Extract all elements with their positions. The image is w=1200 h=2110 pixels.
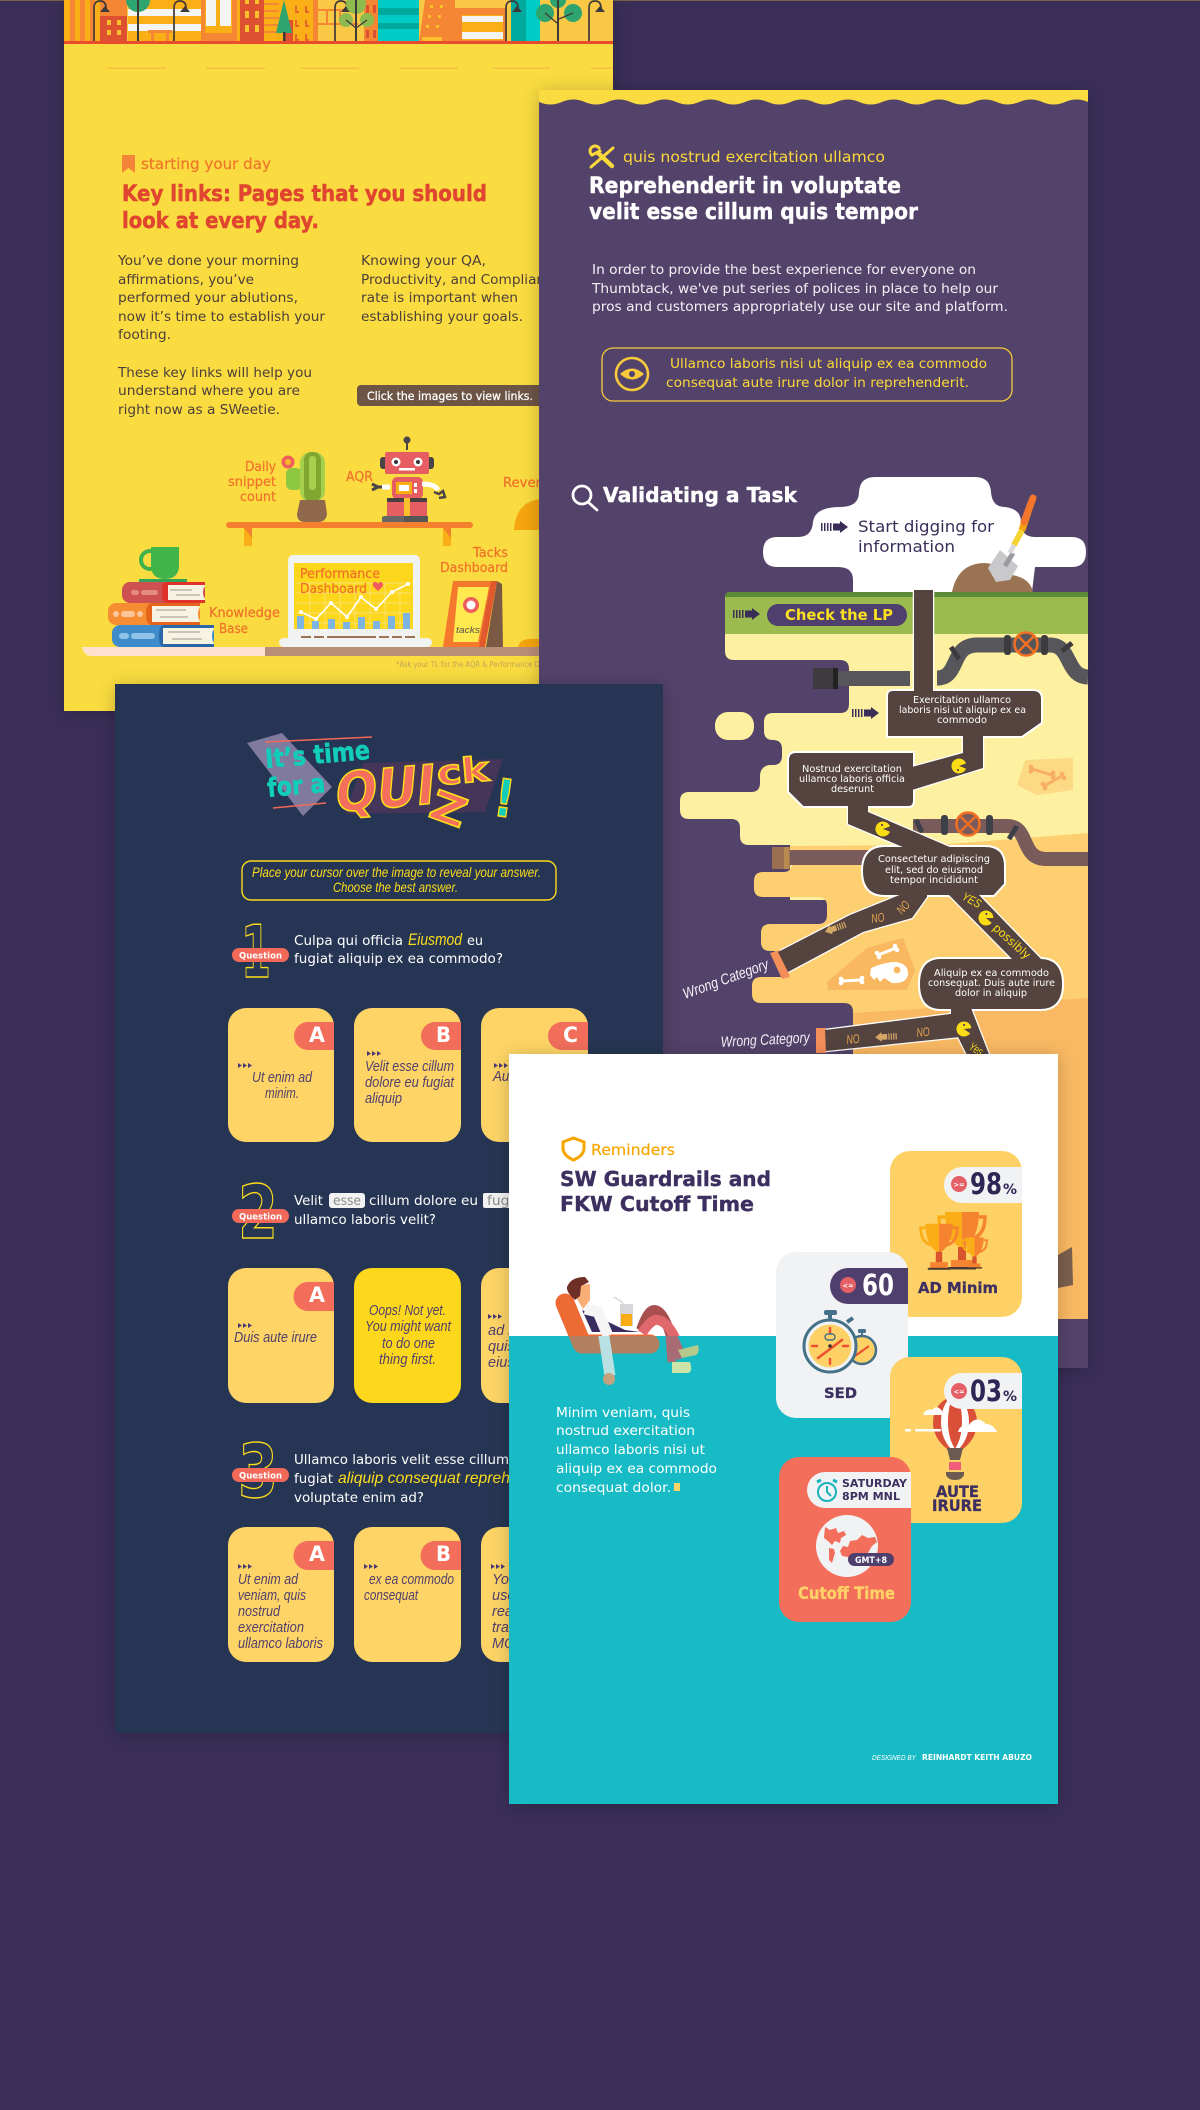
instruction box [242,861,556,900]
illustration: laptop performance dashboard: Performance [300,567,380,582]
soil layers [680,634,1088,1319]
illustration: orange stand [518,639,545,647]
road labels: no [846,898,930,1047]
q3 card B [354,1527,461,1662]
heading: Reprehenderit in voluptate [589,174,901,199]
icon: stopwatches [804,1310,876,1372]
callout: eye note: Ullamco laboris nisi ut aliquip ex ea commodo [670,357,987,372]
q3 card B: consequat [364,1588,419,1604]
q1 card B [354,1008,461,1142]
question 3 [232,1429,559,1515]
text block: left column: understand where you are [118,384,300,399]
q3 card C: read [492,1604,522,1620]
flowchart box 3 [862,846,1005,896]
stat card: aute irure: % [1003,1389,1017,1405]
heading: key links: look at every day. [122,209,319,234]
illustration: bell dome [514,499,545,530]
flowchart box 4: consequat. Duis aute irure [928,978,1055,989]
stat card: aute irure [890,1357,1022,1523]
flowchart box 2 [788,752,914,807]
road labels: no: NO [870,910,885,926]
question 3: voluptate enim ad? [294,1490,424,1506]
q1 card A: Ut enim ad [252,1070,313,1086]
text block: minim veniam: aliquip ex ea commodo [556,1462,717,1477]
label: daily snippet count [228,460,276,505]
flowchart box 3: elit, sed do eiusmod [885,865,983,876]
flowchart roads [770,590,1042,1057]
logo: it's time for a quick quiz: Z [424,782,473,838]
label: daily snippet count: count [240,490,276,505]
text block: left column [117,254,326,418]
q2 card B revealed [354,1268,461,1403]
credit: REINHARDT KEITH ABUZO [922,1753,1032,1762]
flowchart box 1: Exercitation ullamco [913,695,1011,706]
eyebrow: quis nostrud exercitation ullamco [623,148,885,166]
label: tacks dashboard: Dashboard [440,561,508,576]
text block: right column: rate is important when [361,291,518,306]
question 1: eu [467,933,483,949]
stat card: aute irure: AUTE [936,1482,979,1501]
text block: left column: affirmations, you’ve [118,273,254,288]
credit [872,1753,1032,1762]
question 3: 3 [238,1429,278,1515]
panel: reminders [509,1054,1058,1804]
text: start digging [858,517,994,556]
q3 card B: B [436,1542,451,1566]
text block: left column: You’ve done your morning [117,254,299,269]
stat card: aute irure: 03 [970,1374,1002,1408]
illustration: cactus [282,452,327,522]
icon: hot-air balloon [905,1397,997,1480]
icon: globe [816,1515,878,1577]
stat card: SED: SED [824,1386,857,1402]
flowchart box 4: dolor in aliquip [955,988,1027,999]
question 3: Ullamco laboris velit esse cillum [294,1452,509,1468]
question 3: fugiat [294,1471,333,1487]
label: daily snippet count: snippet [228,475,276,490]
q1 card B: aliquip [365,1091,402,1107]
q3 card C: use [492,1588,515,1604]
icon: arrow at box 1 [852,707,879,719]
text block: minim veniam: nostrud exercitation [556,1424,695,1439]
panel: starting your day [64,0,613,711]
icon: arrow to start digging [821,521,848,533]
heading: velit esse cillum quis tempor [589,200,918,225]
illustration: laptop performance dashboard [279,555,432,647]
q1 card A [228,1008,334,1142]
intro paragraph: Thumbtack, we've put series of polices in place to help our [591,282,999,297]
icon: magnifier [573,486,597,510]
question 2 [232,1170,527,1256]
q2 card B revealed: to do one [382,1336,435,1352]
q2 card A [228,1268,334,1403]
pacman markers [875,759,995,1038]
section heading: validating a task: Validating a Task [603,483,798,507]
illustration: robot [372,436,445,522]
logo: it's time for a quick quiz: QUI [333,752,438,825]
text block: left column: right now as a SWeetie. [118,403,280,418]
icon: alarm clock [817,1480,837,1501]
label: daily snippet count: Daily [245,460,276,475]
stat card: SED: 60 [862,1268,894,1302]
q2 card C: ad minim [488,1323,547,1339]
stat card: cutoff time: Cutoff Time [798,1584,895,1603]
text block: minim veniam: ullamco laboris nisi ut [556,1443,705,1458]
flowchart box 1: laboris nisi ut aliquip ex ea [899,705,1026,716]
road junction fill [778,590,1042,1057]
question 1: Eiusmod [408,930,462,949]
q1 card C [481,1008,588,1142]
stat card: AD minim: >= [954,1181,965,1189]
text block: right column: Knowing your QA, [361,254,486,269]
intro paragraph [591,263,1008,315]
callout: eye note: consequat aute irure dolor in reprehenderit. [666,376,969,391]
question 2: fugiat [487,1193,527,1209]
q3 card B: ex ea commodo [369,1572,454,1588]
road labels: no: NO [846,1032,860,1047]
q3 card A: veniam, quis [238,1588,306,1604]
q3 card A: ullamco laboris [238,1636,323,1652]
text block: left column: footing. [118,328,171,343]
fossil: bones rock [1017,758,1073,795]
label: revert: Reverts [503,476,553,491]
road labels: no: NO [894,898,913,917]
q2 card C [481,1268,588,1403]
road labels: yes possibly: YES [960,889,984,911]
question 3: aliquip consequat reprehenderit [338,1470,559,1487]
text: start digging: Start digging for [858,517,994,536]
q2 card A: Duis aute irure [234,1330,317,1346]
label: knowledge base [209,606,280,637]
logo: it's time for a quick quiz: for a [266,769,326,804]
question 2: esse [333,1193,361,1209]
intro paragraph: pros and customers appropriately use our site and platform. [592,300,1008,315]
q1 card A: A [309,1023,326,1047]
logo: it's time for a quick quiz: ! [490,768,518,831]
text block: minim veniam: Minim veniam, quis [556,1406,690,1421]
label: tacks dashboard [440,546,508,576]
stat card: AD minim [890,1151,1022,1317]
stat card: cutoff time: 8PM MNL [842,1490,900,1503]
flowchart box 1 [887,690,1042,737]
stat card: SED [776,1252,908,1418]
instruction box: Choose the best answer. [333,879,458,895]
pipe with valve: lower [772,812,1088,869]
question 2: Question [239,1212,282,1222]
q1 card B: B [436,1023,451,1047]
text: start digging: information [858,537,955,556]
instruction box: Place your cursor over the image to reveal your answer. [252,864,541,880]
illustration: tacks frame: tacks [456,625,481,635]
road labels: yes possibly [960,889,1034,1059]
q1 card C: Aut [492,1069,514,1085]
stat card: aute irure: <= [954,1388,965,1396]
flowchart box 2: ullamco laboris officia [799,774,905,785]
q3 card A: nostrud [238,1604,281,1620]
text block: right column [361,254,561,325]
illustration: shovel and dirt mound [952,498,1033,592]
stat card: AD minim: 98 [970,1167,1002,1201]
illustration: relaxing man [565,1277,699,1385]
text block: right column: Productivity, and Compliance [361,273,561,288]
panel: validating a task [539,90,1088,1368]
panel: quiz [115,684,663,1733]
button: click the images [357,385,557,406]
fossil: dinosaur skull [827,938,915,990]
icon: bookmark [122,155,135,173]
text block: left column: These key links will help you [117,366,312,381]
q3 card C: You [492,1572,517,1588]
q3 card C [481,1527,588,1662]
label: wrong category 1: Wrong Category [681,956,772,1003]
q3 card A: Ut enim ad [238,1572,299,1588]
stat card: AD minim: % [1003,1182,1017,1198]
flowchart box 4: Aliquip ex ea commodo [934,968,1049,979]
illustration: coffee cup and books [108,547,214,647]
heading [589,174,918,225]
pill: check the LP [767,604,907,626]
illustration: tacks frame [443,581,503,647]
icon: arrow to check the LP [733,608,760,620]
q1 card B: dolore eu fugiat [365,1075,455,1091]
text block: minim veniam: consequat dolor. [556,1481,671,1496]
text block: minim veniam [556,1406,717,1496]
flowchart box 3: Consectetur adipiscing [878,854,990,865]
q2 card B revealed: thing first. [379,1352,436,1368]
illustration: shelf [226,522,473,546]
question 2: 2 [238,1170,278,1256]
text block: right column: establishing your goals. [361,310,523,325]
illustration: laptop performance dashboard: Dashboard [300,582,367,597]
q3 card C: MQ [492,1636,515,1652]
q2 card A: A [309,1283,326,1307]
text block: left column: performed your ablutions, [118,291,298,306]
label: tacks dashboard: Tacks [472,546,508,561]
q2 card B revealed: You might want [365,1319,452,1335]
icon: tools [590,146,613,167]
flowchart box 3: tempor incididunt [890,875,978,886]
q2 card B revealed: Oops! Not yet. [369,1303,446,1319]
road arrows [823,920,897,1042]
q1 card C: C [563,1023,578,1047]
stat card: AD minim: AD Minim [918,1279,998,1297]
q3 card A: A [309,1542,326,1566]
pill: check the LP: Check the LP [785,606,893,624]
eyebrow: starting your day: starting your day [141,155,271,173]
illustration: city skyline strip [64,0,613,44]
stat card: cutoff time [779,1457,911,1622]
q2 card C: quis [488,1339,515,1355]
question 1: Question [239,952,282,962]
flowchart box 1: commodo [937,715,987,726]
label: wrong category 2: Wrong Category [720,1029,811,1051]
eyebrow: reminders: Reminders [591,1141,675,1159]
heading: SW Guardrails and [560,1167,771,1191]
grass strip [725,592,1088,634]
logo: it's time for a quick quiz [247,733,518,838]
q2 card C: eiusmod [488,1355,544,1371]
heading: key links: Key links: Pages that you should [122,182,487,207]
road labels: no: NO [916,1025,930,1040]
logo: it's time for a quick quiz: ck [435,749,492,794]
heading: key links [122,182,487,234]
heading: FKW Cutoff Time [560,1192,754,1216]
pipe with valve: upper [813,632,1088,689]
label: knowledge base: Base [219,622,248,637]
q3 card A: exercitation [238,1620,304,1636]
button: click the images: Click the images to view links. [367,389,533,403]
icon: shield [563,1138,584,1160]
q3 card A [228,1527,334,1662]
flowchart box 2: deserunt [831,784,874,795]
credit: DESIGNED BY [872,1755,917,1762]
question 3: Question [239,1472,282,1482]
flowchart box 2: Nostrud exercitation [802,764,902,775]
stat card: cutoff time: GMT+8 [855,1556,887,1566]
question 1: fugiat aliquip ex ea commodo? [294,951,503,967]
stat card: cutoff time: SATURDAY [842,1477,908,1490]
q1 card B: Velit esse cillum [365,1059,454,1075]
text block: left column: now it’s time to establish your [118,310,326,325]
intro paragraph: In order to provide the best experience for everyone on [592,263,976,278]
stat card: SED: <= [842,1282,854,1290]
illustration: desk [82,647,539,656]
question 2: ullamco laboris velit? [294,1212,436,1228]
question 1 [232,910,503,994]
road labels: yes possibly: possibly [990,921,1034,962]
white cloud [763,477,1086,592]
stat card: aute irure: IRURE [932,1496,982,1515]
road labels: yes possibly: Yes [966,1039,986,1059]
question 1: Culpa qui officia [294,933,403,949]
yellow wavy header band [539,90,1088,104]
label: knowledge base: Knowledge [209,606,280,621]
callout: eye note [602,348,1012,401]
heading [560,1167,771,1216]
label: AQR: AQR [346,470,373,485]
q1 card A: minim. [265,1086,299,1102]
question 1: 1 [241,910,271,994]
q3 card C: train [492,1620,520,1636]
question 2: Velit [294,1193,323,1209]
logo: it's time for a quick quiz: It’s time [264,736,371,775]
flowchart box 4 [919,958,1063,1010]
footnote: *Ask your TL for the AQR & Performance Dashboard [396,660,571,669]
question 2: cillum dolore eu [369,1193,478,1209]
